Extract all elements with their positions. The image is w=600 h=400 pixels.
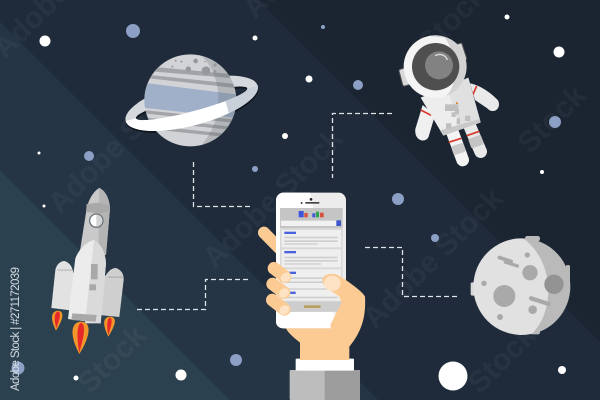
astronaut (399, 35, 499, 160)
torso (421, 78, 481, 136)
watermark: Adobe Stock (42, 67, 195, 220)
core (68, 240, 106, 323)
fingers (272, 268, 293, 317)
helmet (399, 68, 411, 86)
dashed connectors (137, 114, 458, 310)
right booster (99, 268, 124, 317)
right arm (470, 83, 499, 111)
index finger (264, 233, 279, 248)
sleeve (290, 370, 360, 400)
shirt cuff (296, 359, 354, 371)
left booster (51, 261, 74, 311)
watermark: Stock (512, 79, 593, 160)
stock id caption: Adobe Stock | #271172039 (10, 267, 22, 391)
watermark: Adobe Stock (357, 182, 510, 335)
rocket (51, 188, 124, 354)
planet with ring (120, 53, 264, 148)
moon (471, 236, 570, 335)
left arm (415, 105, 435, 140)
watermark: Adobe Stock (197, 122, 350, 275)
phone (276, 193, 346, 328)
hand holding phone (264, 193, 365, 400)
watermark: Stock (462, 319, 543, 400)
watermark: Stock (72, 319, 153, 400)
legs (452, 130, 463, 160)
palm and thumb (286, 274, 365, 360)
